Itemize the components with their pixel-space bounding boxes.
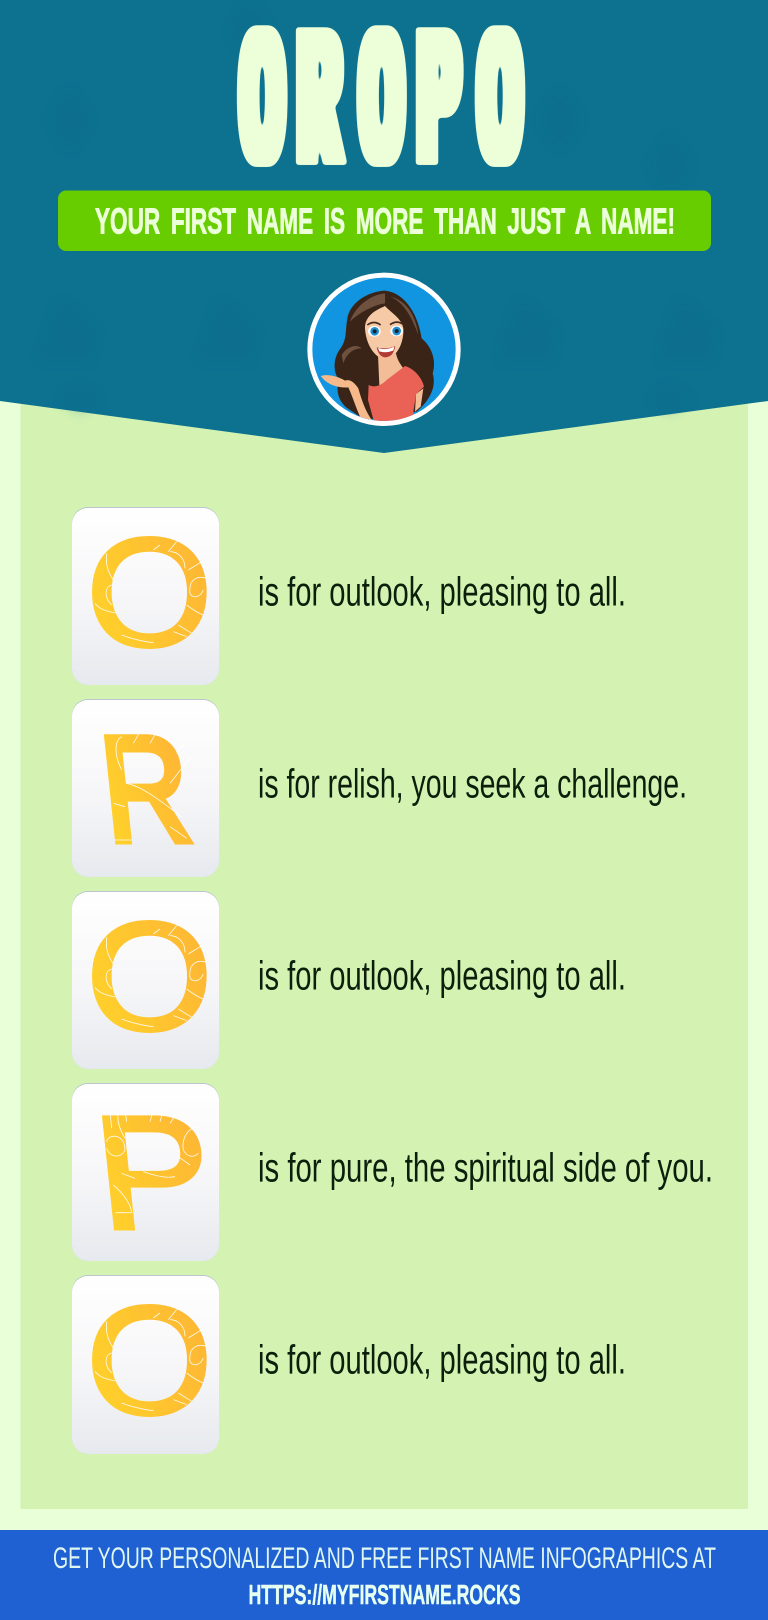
- letter P: P: [87, 1084, 219, 1263]
- letter R: R: [94, 706, 198, 873]
- banner: tagline: [58, 190, 711, 251]
- card 5: letter O: [72, 1275, 219, 1454]
- title: OROPO: [240, 0, 522, 224]
- header band: [0, 0, 768, 453]
- text: O line: is for outlook, pleasing to all.: [258, 953, 626, 999]
- card 1: letter O: [72, 507, 219, 685]
- card 4: letter P: [72, 1083, 219, 1263]
- letter O: O: [86, 891, 212, 1063]
- footer url: HTTPS://MYFIRSTNAME.ROCKS: [248, 1579, 520, 1610]
- panel: letter list background: [20, 380, 748, 1509]
- text: O line: is for outlook, pleasing to all.: [258, 569, 626, 615]
- letter O: O: [86, 1275, 212, 1447]
- card 2: letter R: [72, 699, 219, 877]
- card 3: letter O: [72, 891, 219, 1069]
- letter O: O: [86, 507, 212, 679]
- footer: [0, 1530, 768, 1620]
- avatar: cartoon woman in circle: [307, 273, 461, 426]
- text: O line: is for outlook, pleasing to all.: [258, 1337, 626, 1383]
